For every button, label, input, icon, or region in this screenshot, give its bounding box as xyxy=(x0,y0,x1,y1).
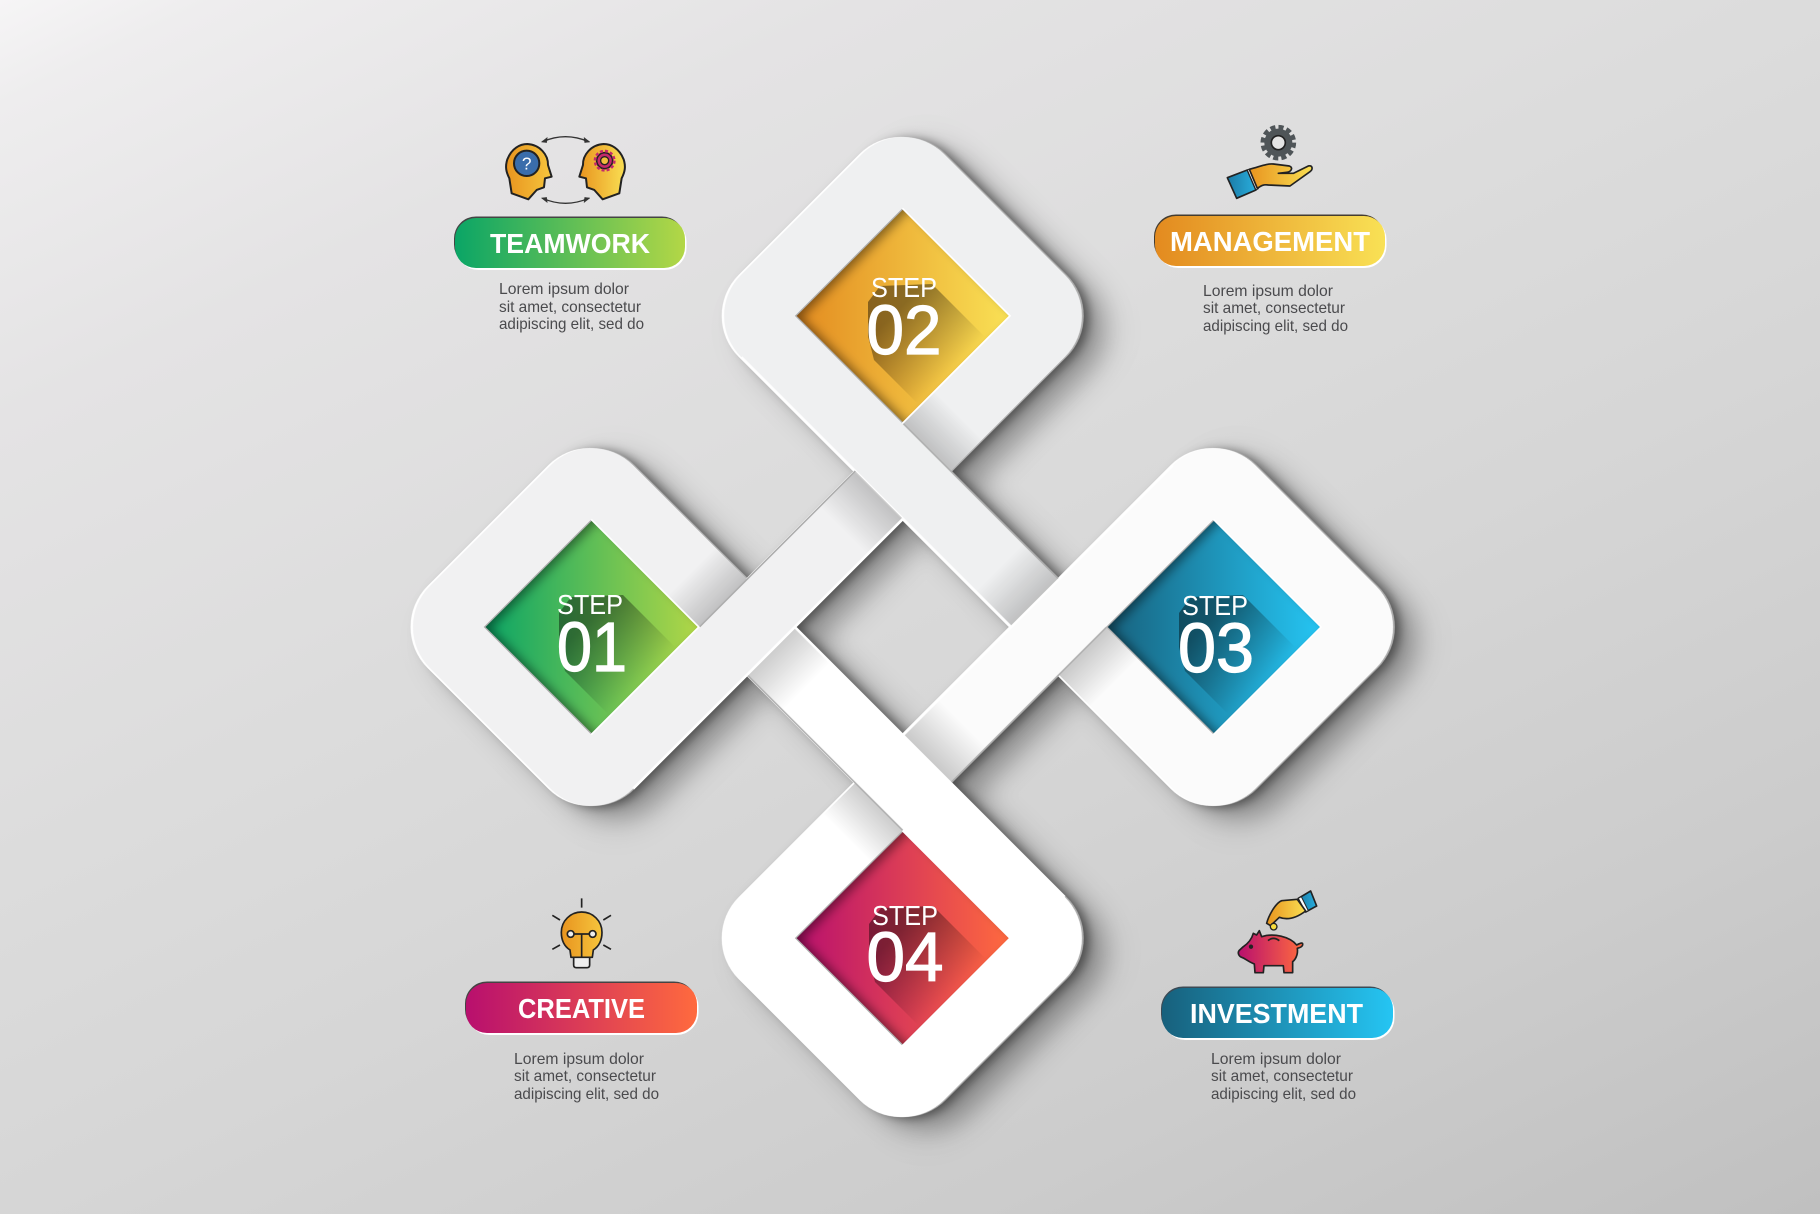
creative description: adipiscing elit, sed do xyxy=(514,1086,659,1103)
icon: piggy bank and coin xyxy=(1238,891,1317,973)
teamwork description xyxy=(499,281,644,333)
icon: hand holding gear xyxy=(1227,127,1312,198)
management description xyxy=(1203,283,1348,335)
management description: sit amet, consectetur xyxy=(1203,300,1346,317)
step 04 label: 04 xyxy=(866,918,944,996)
step 04 colour diamond xyxy=(796,832,1009,1044)
investment description: adipiscing elit, sed do xyxy=(1211,1086,1356,1103)
step 01 colour diamond xyxy=(486,521,698,733)
investment pill xyxy=(1161,986,1394,1040)
creative description: sit amet, consectetur xyxy=(514,1068,657,1085)
step 02 label: 02 xyxy=(866,291,942,369)
ribbon soft cast shadow xyxy=(412,126,1440,1155)
icon: two heads exchanging ideas: ? xyxy=(522,153,531,173)
icon: two heads exchanging ideas xyxy=(506,137,625,203)
creative description xyxy=(514,1051,659,1103)
step 02 label: STEP xyxy=(871,272,937,303)
management pill: MANAGEMENT xyxy=(1170,226,1370,257)
step 04 label: STEP xyxy=(872,900,938,931)
panel: management xyxy=(1154,127,1386,335)
creative description: Lorem ipsum dolor xyxy=(514,1051,645,1068)
step 03 colour diamond xyxy=(1108,521,1320,733)
teamwork description: Lorem ipsum dolor xyxy=(499,281,630,298)
creative pill xyxy=(465,982,698,1035)
investment description xyxy=(1211,1051,1356,1103)
management description: adipiscing elit, sed do xyxy=(1203,318,1348,335)
investment pill: INVESTMENT xyxy=(1190,998,1363,1029)
teamwork description: adipiscing elit, sed do xyxy=(499,316,644,333)
woven ribbon knot xyxy=(387,109,1424,1147)
investment description: Lorem ipsum dolor xyxy=(1211,1051,1342,1068)
step 01 label: STEP xyxy=(557,589,623,620)
panel: teamwork xyxy=(454,137,686,333)
step 03 label: 03 xyxy=(1178,609,1254,687)
teamwork description: sit amet, consectetur xyxy=(499,299,642,316)
investment description: sit amet, consectetur xyxy=(1211,1068,1354,1085)
teamwork pill xyxy=(454,216,686,270)
management pill xyxy=(1154,214,1386,268)
step 03 label: STEP xyxy=(1182,590,1248,621)
step 01 label: 01 xyxy=(557,608,627,686)
step 02 colour diamond xyxy=(796,210,1009,422)
management description: Lorem ipsum dolor xyxy=(1203,283,1334,300)
icon: light bulb xyxy=(552,898,611,968)
panel: creative xyxy=(465,898,698,1103)
panel: investment xyxy=(1161,891,1394,1103)
creative pill: CREATIVE xyxy=(518,993,645,1024)
teamwork pill: TEAMWORK xyxy=(490,228,650,259)
